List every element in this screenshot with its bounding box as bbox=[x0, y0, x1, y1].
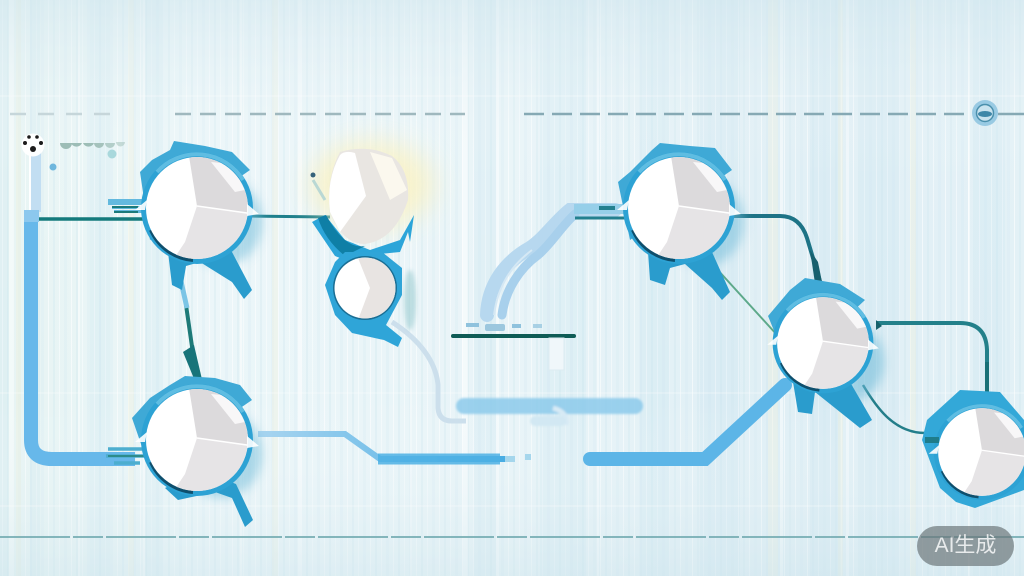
badge: AI generated label: AI生成 bbox=[935, 534, 996, 557]
pipe: node 4 connector stubs bbox=[106, 449, 144, 463]
node 6 bbox=[767, 278, 884, 428]
pale vertical tube below bar bbox=[549, 338, 564, 370]
pipe: dark teal from left riser to node 1 bbox=[39, 199, 150, 219]
top dashed line right segment bbox=[524, 113, 1024, 115]
node 3 bbox=[325, 252, 416, 347]
left vertical pale riser bbox=[29, 150, 41, 212]
small marks above dark bar bbox=[466, 323, 542, 331]
small probe near node 2 bbox=[310, 172, 325, 200]
bottom baseline bbox=[0, 536, 1024, 538]
pipe: node 6 to node 7 bottom curve bbox=[863, 385, 925, 433]
node 5 bbox=[617, 143, 744, 300]
pipe: node 4 outflow left blue section bbox=[258, 434, 531, 459]
dark green bar bbox=[451, 334, 576, 338]
pipe: node 1 to node 2 bbox=[248, 216, 330, 217]
top dashed line left segment bbox=[10, 113, 465, 115]
node 2 upper with yellow glow bbox=[310, 141, 434, 258]
icon: football marker bbox=[22, 134, 44, 156]
small teal and blue dots bbox=[50, 150, 116, 170]
pipe: node 5 to node 6 curve bbox=[732, 216, 824, 292]
node 4 bbox=[132, 376, 262, 527]
end target icon top right bbox=[972, 100, 998, 126]
wavy pale pipe centre bbox=[487, 204, 628, 315]
pipe: left main blue pipe bbox=[24, 210, 135, 459]
pipe: pale horizontal band centre bbox=[456, 398, 643, 426]
pipe: node 6 to node 7 top bbox=[876, 320, 989, 396]
row of small green dots bbox=[60, 142, 125, 149]
pipe: pale grey from node 3 bbox=[392, 322, 466, 421]
badge: AI generated label bbox=[917, 526, 1014, 566]
node 7 bbox=[922, 390, 1024, 508]
node 1 bbox=[135, 141, 262, 299]
pipe: thin node 5 to node 6 diagonal bbox=[716, 268, 778, 336]
pipe: node 1 to node 4 vertical bbox=[178, 268, 204, 388]
pipe: right blue pipe to node 6 bbox=[590, 385, 785, 459]
